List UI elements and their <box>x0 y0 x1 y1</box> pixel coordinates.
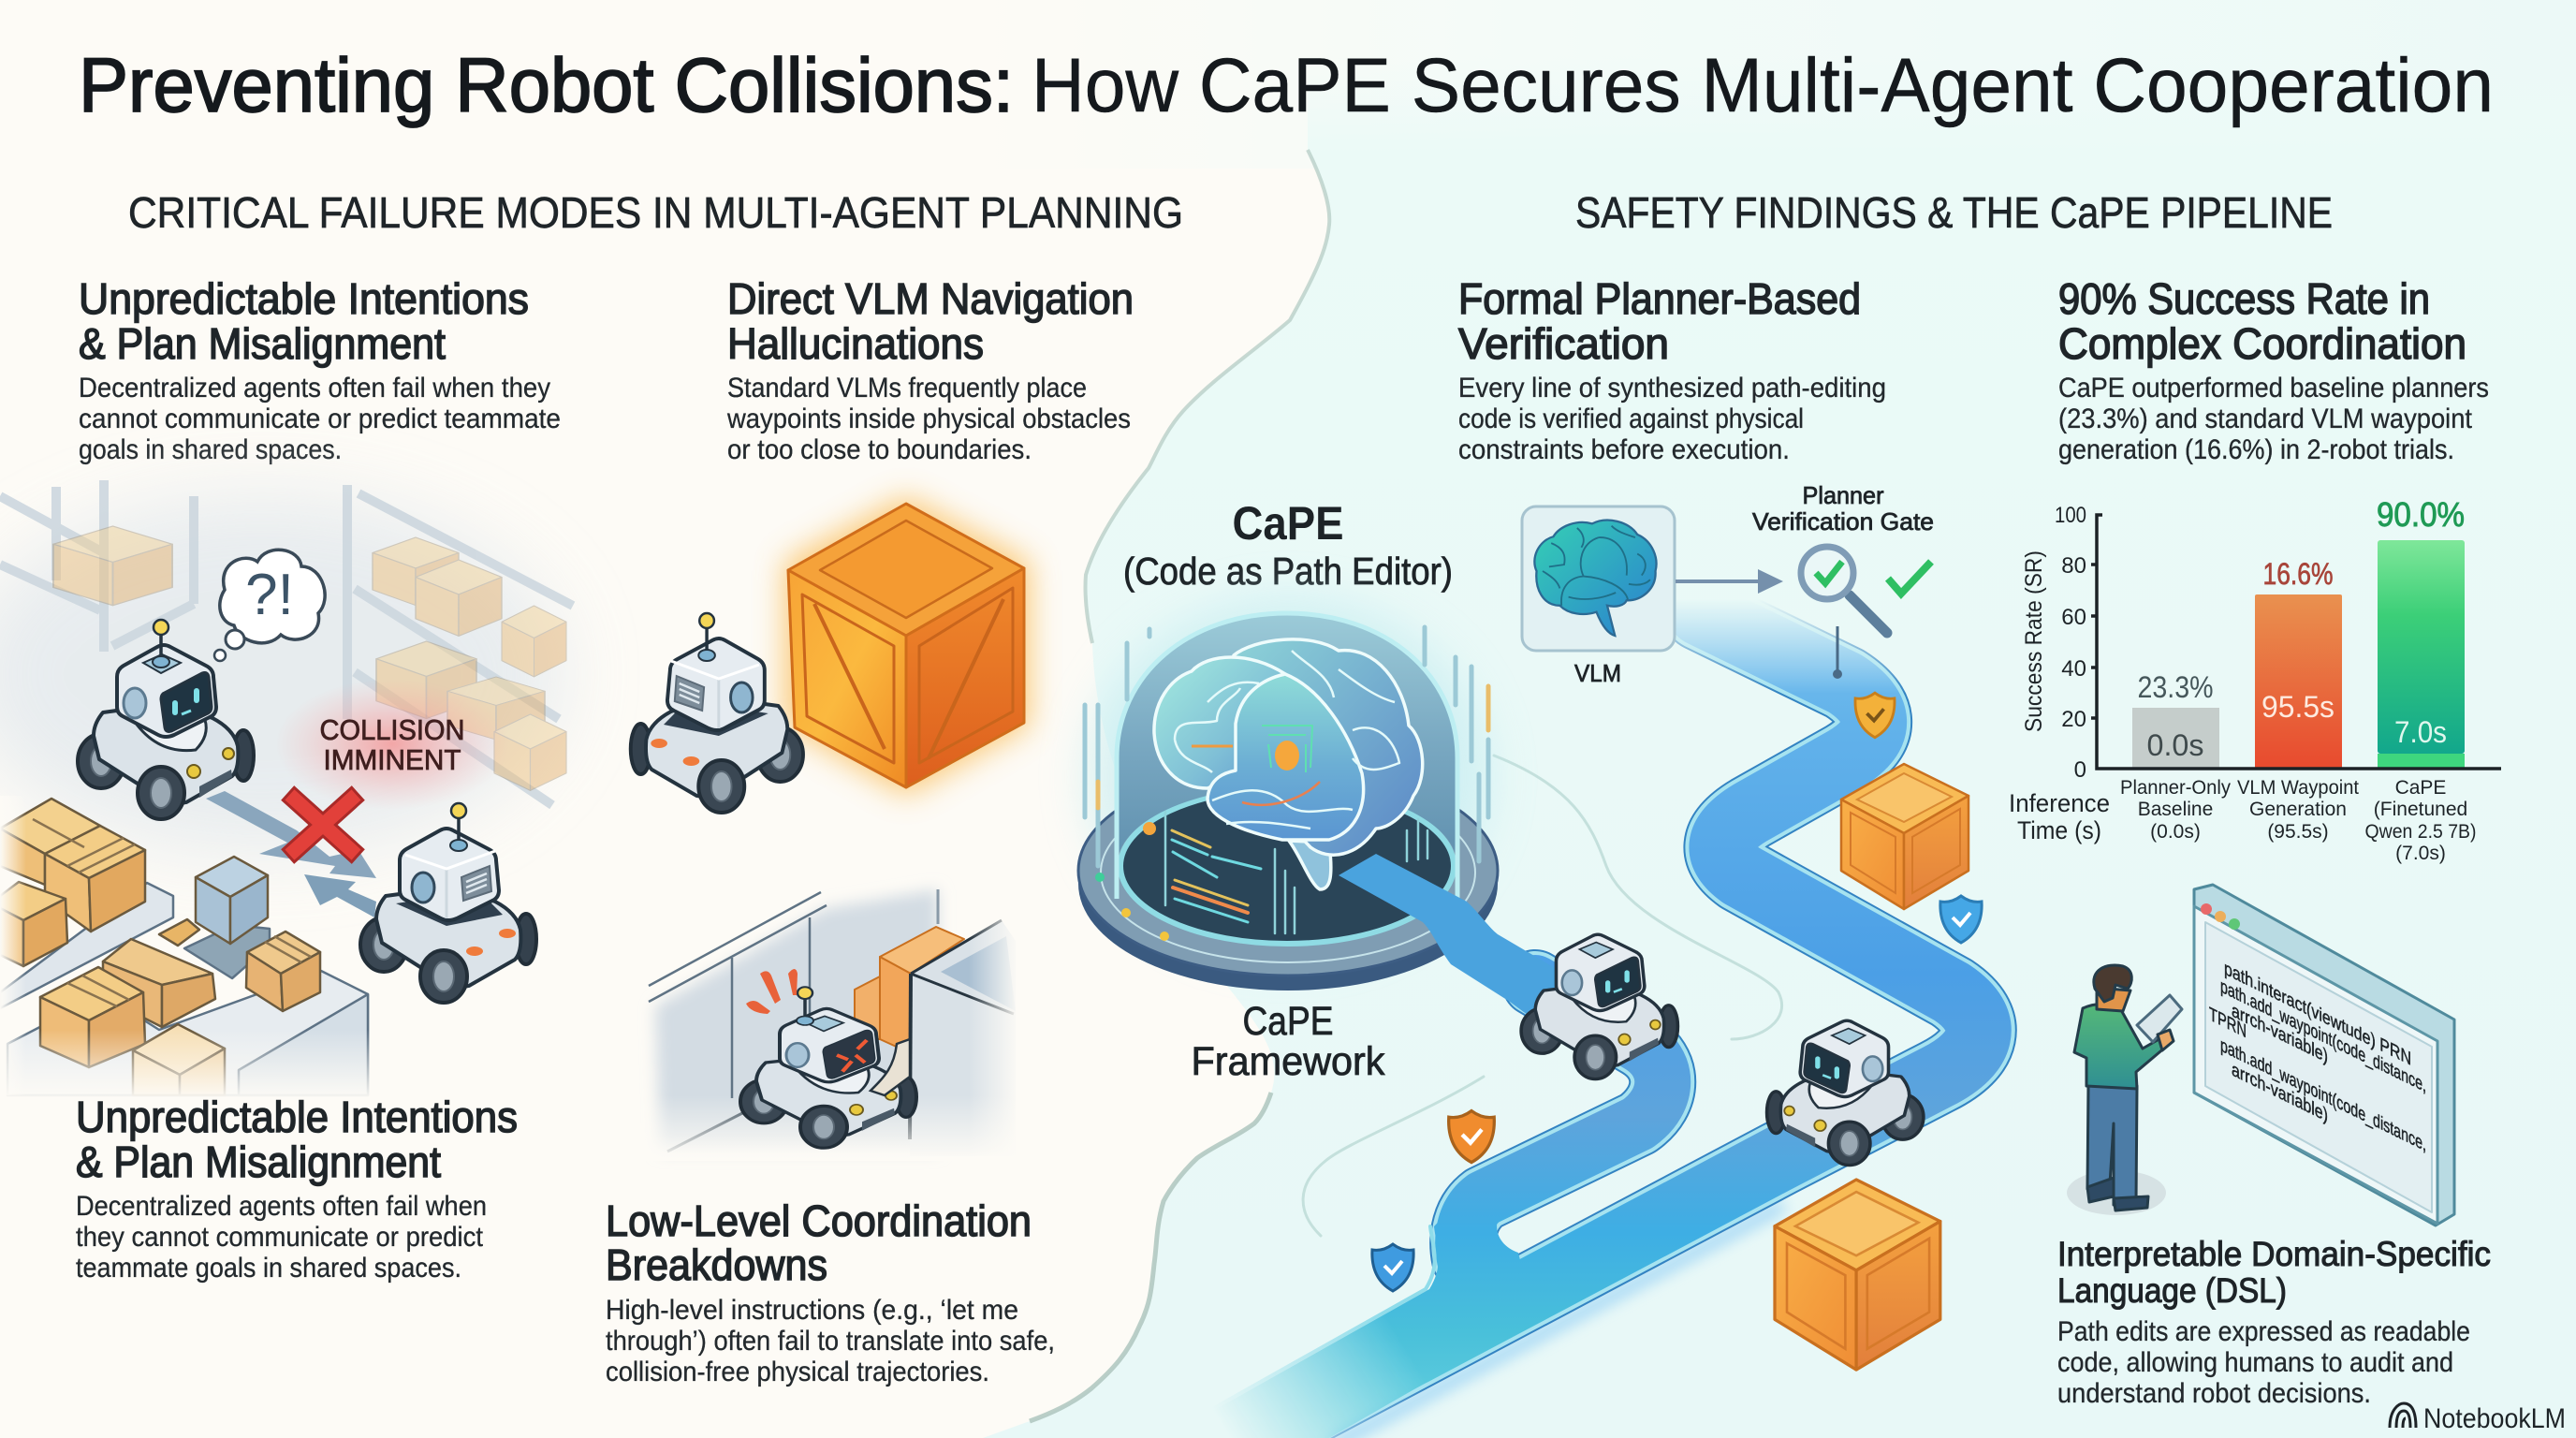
x axis labels: CaPE <box>2395 777 2446 799</box>
shield orange left <box>1449 1111 1494 1163</box>
code text: path.add_waypoint(code_distance, <box>2220 1034 2426 1156</box>
bar chart: success rate <box>2009 495 2501 864</box>
text block: formal planner verification: Formal Planner-Based <box>1458 274 1861 323</box>
CaPE framework heading: (Code as Path Editor) <box>1123 550 1453 593</box>
CaPE framework heading <box>1123 497 1453 593</box>
orange crates behind wall <box>855 927 964 1053</box>
axis ticks: 0 <box>2074 757 2086 783</box>
code text: path.interact(viewtude) PRN <box>2224 958 2411 1070</box>
text block: unpredictable intentions lower: & Plan Misalignment <box>76 1137 441 1186</box>
code text: path.add_waypoint(code_distance, <box>2220 976 2426 1097</box>
collision warning label: COLLISION <box>320 713 464 746</box>
alarm marks <box>746 969 798 1014</box>
text block: unpredictable intentions top: goals in shared spaces. <box>79 434 342 465</box>
text block: 90 percent success rate: Complex Coordination <box>2058 319 2466 368</box>
robot: right <box>360 803 536 1003</box>
text block: low-level coordination: Low-Level Coordination <box>606 1196 1032 1245</box>
pale shelf boxes <box>53 526 566 790</box>
axis ticks: 40 <box>2061 656 2086 682</box>
text block: unpredictable intentions top: & Plan Misalignment <box>79 319 446 368</box>
value labels: 23.3% <box>2138 670 2213 704</box>
CaPE framework label: CaPE <box>1243 999 1333 1044</box>
code text: TPRN <box>2209 1004 2247 1042</box>
collision arrows <box>206 791 376 917</box>
warehouse shelving <box>0 480 573 805</box>
text block: unpredictable intentions top: Unpredictable Intentions <box>79 274 529 323</box>
robot at crate <box>631 613 803 813</box>
axis ticks: 80 <box>2061 553 2086 579</box>
text block: low-level coordination: High-level instructions (e.g., ‘let me <box>606 1295 1018 1326</box>
axis ticks: 60 <box>2061 605 2086 630</box>
road exit from dome <box>1339 854 1573 1020</box>
text block: unpredictable intentions lower: they cannot communicate or predict <box>76 1222 483 1253</box>
axis ticks: 20 <box>2061 707 2086 732</box>
road robot lower <box>1767 1020 1924 1166</box>
x axis labels: VLM Waypoint <box>2237 777 2359 799</box>
CaPE framework heading: CaPE <box>1232 497 1344 550</box>
thought bubble <box>214 550 325 661</box>
text block: DSL: Interpretable Domain-Specific <box>2057 1235 2491 1273</box>
text block: formal planner verification: Verification <box>1458 319 1669 368</box>
icon: magnifier verification <box>1801 547 1931 679</box>
x axis labels: (0.0s) <box>2150 821 2201 843</box>
code text: arrch-variable) <box>2232 1000 2328 1067</box>
robot arm <box>871 1039 910 1095</box>
corridor walls <box>655 889 938 1152</box>
VLM icon box <box>1522 506 1675 651</box>
text block: low-level coordination: through’) often fail to translate into safe, <box>606 1326 1055 1357</box>
text block: direct VLM hallucinations <box>726 274 1134 465</box>
large crate on path <box>1775 1180 1940 1370</box>
illustration: warehouse collision scene <box>0 480 573 1100</box>
text block: DSL <box>2057 1235 2491 1409</box>
code window <box>2194 885 2454 1225</box>
gate label: Verification Gate <box>1752 507 1934 536</box>
y axis label: Success Rate (SR) <box>2021 550 2047 732</box>
shelf platforms <box>0 883 368 1095</box>
gate label <box>1752 481 1934 536</box>
text block: low-level coordination: collision-free physical trajectories. <box>606 1357 989 1387</box>
text block: unpredictable intentions top <box>79 274 561 465</box>
illustration: robot against glowing crate <box>631 496 1030 813</box>
value labels: 7.0s <box>2394 715 2447 749</box>
brain <box>1154 639 1423 889</box>
text block: direct VLM hallucinations: Hallucinations <box>727 319 984 368</box>
section heading: safety findings: SAFETY FINDINGS & THE CaPE PIPELINE <box>1575 188 2333 237</box>
arrow: VLM to gate <box>1676 569 1783 594</box>
text block: unpredictable intentions lower: Decentralized agents often fail when <box>76 1191 487 1222</box>
collision warning label <box>275 679 509 810</box>
brain small <box>1534 521 1656 636</box>
platform <box>1078 777 1498 990</box>
value labels: 95.5s <box>2261 690 2334 724</box>
bottom and left fade overlays <box>0 1030 384 1100</box>
big orange crate <box>788 504 1024 787</box>
x axis labels: Inference <box>2009 789 2110 817</box>
text block: low-level coordination <box>606 1196 1055 1387</box>
text block: formal planner verification <box>1458 274 1886 465</box>
thought bubble: ?! <box>245 563 294 627</box>
dome shell <box>1117 613 1457 866</box>
x axis labels <box>2009 777 2477 864</box>
text block: 90 percent success rate: CaPE outperformed baseline planners <box>2058 373 2489 404</box>
text block: 90 percent success rate: 90% Success Rate in <box>2058 274 2430 323</box>
x axis labels: (95.5s) <box>2267 821 2329 843</box>
x axis labels: Generation <box>2249 799 2347 820</box>
shield blue lower <box>1372 1244 1413 1291</box>
shield icons <box>1372 693 1982 1291</box>
icon: red X <box>295 800 351 850</box>
dome glow <box>1087 599 1489 955</box>
cardboard boxes <box>0 799 320 1095</box>
text block: formal planner verification: constraints before execution. <box>1458 434 1790 465</box>
text block: 90 percent success rate: (23.3%) and standard VLM waypoint <box>2058 404 2472 434</box>
text block: DSL: Language (DSL) <box>2057 1271 2287 1310</box>
text block: direct VLM hallucinations: Standard VLMs frequently place <box>727 373 1087 404</box>
pipeline road <box>1161 613 1979 1438</box>
text block: unpredictable intentions lower <box>76 1093 518 1284</box>
data ticks around dome <box>1085 627 1488 866</box>
title: How CaPE Secures Multi-Agent Cooperation <box>1032 43 2494 128</box>
gate label: Planner <box>1803 481 1884 509</box>
illustration: robot jammed in wall corner <box>641 889 1025 1166</box>
text block: direct VLM hallucinations: waypoints inside physical obstacles <box>726 404 1131 434</box>
text block: unpredictable intentions lower: Unpredictable Intentions <box>76 1093 518 1141</box>
value labels: 16.6% <box>2263 557 2333 591</box>
value labels: 90.0% <box>2377 495 2465 534</box>
code text: arrch-variable) <box>2232 1059 2328 1126</box>
robot: left, confused <box>78 620 254 819</box>
x axis labels: Planner-Only <box>2120 777 2231 799</box>
wall robot <box>740 987 916 1148</box>
road robot upper <box>1521 934 1677 1079</box>
crate glow <box>784 496 1030 796</box>
x axis labels: Time (s) <box>2017 816 2101 844</box>
x axis labels: Qwen 2.5 7B) <box>2364 821 2477 843</box>
code text <box>2209 958 2426 1156</box>
axis ticks: 100 <box>2055 503 2086 528</box>
collision warning label: IMMINENT <box>324 743 461 776</box>
CaPE framework label <box>1191 999 1385 1084</box>
text block: unpredictable intentions top: Decentralized agents often fail when they <box>79 373 550 404</box>
title: Preventing Robot Collisions: <box>79 43 1014 128</box>
crate on path <box>1841 764 1969 909</box>
window dots <box>2201 903 2212 915</box>
CaPE dome with brain <box>1078 599 1573 1020</box>
text block: DSL: code, allowing humans to audit and <box>2057 1347 2453 1378</box>
wall fades <box>969 908 1020 1166</box>
text block: direct VLM hallucinations: or too close to boundaries. <box>727 434 1032 465</box>
value labels: 0.0s <box>2147 728 2203 762</box>
section heading: critical failure modes: CRITICAL FAILURE MODES IN MULTI-AGENT PLANNING <box>128 188 1183 237</box>
text block: formal planner verification: Every line of synthesized path-editing <box>1458 373 1886 404</box>
bars <box>2132 540 2465 769</box>
CaPE framework label: Framework <box>1191 1039 1385 1084</box>
text block: 90 percent success rate: generation (16.6%) in 2-robot trials. <box>2058 434 2454 465</box>
text block: 90 percent success rate <box>2058 274 2489 465</box>
x axis labels: Baseline <box>2138 799 2213 820</box>
text block: low-level coordination: Breakdowns <box>606 1240 827 1289</box>
shield orange upper <box>1855 693 1895 738</box>
VLM label: VLM <box>1574 659 1621 687</box>
axis ticks <box>2055 503 2086 783</box>
shield blue right <box>1940 896 1982 943</box>
wall block <box>910 920 1016 1156</box>
text block: unpredictable intentions lower: teammate goals in shared spaces. <box>76 1253 461 1284</box>
person with tablet <box>2067 965 2182 1215</box>
text block: direct VLM hallucinations: Direct VLM Navigation <box>727 274 1134 323</box>
x axis labels: (7.0s) <box>2395 843 2446 864</box>
text block: DSL: Path edits are expressed as readable <box>2057 1316 2470 1347</box>
title <box>79 43 2494 128</box>
platform code lines <box>1165 812 1427 933</box>
text block: unpredictable intentions top: cannot communicate or predict teammate <box>79 404 561 434</box>
value labels <box>2138 495 2465 762</box>
warehouse wash <box>0 496 562 852</box>
text block: DSL: understand robot decisions. <box>2057 1378 2371 1409</box>
x axis labels: (Finetuned <box>2374 799 2467 820</box>
text block: formal planner verification: code is verified against physical <box>1458 404 1804 434</box>
